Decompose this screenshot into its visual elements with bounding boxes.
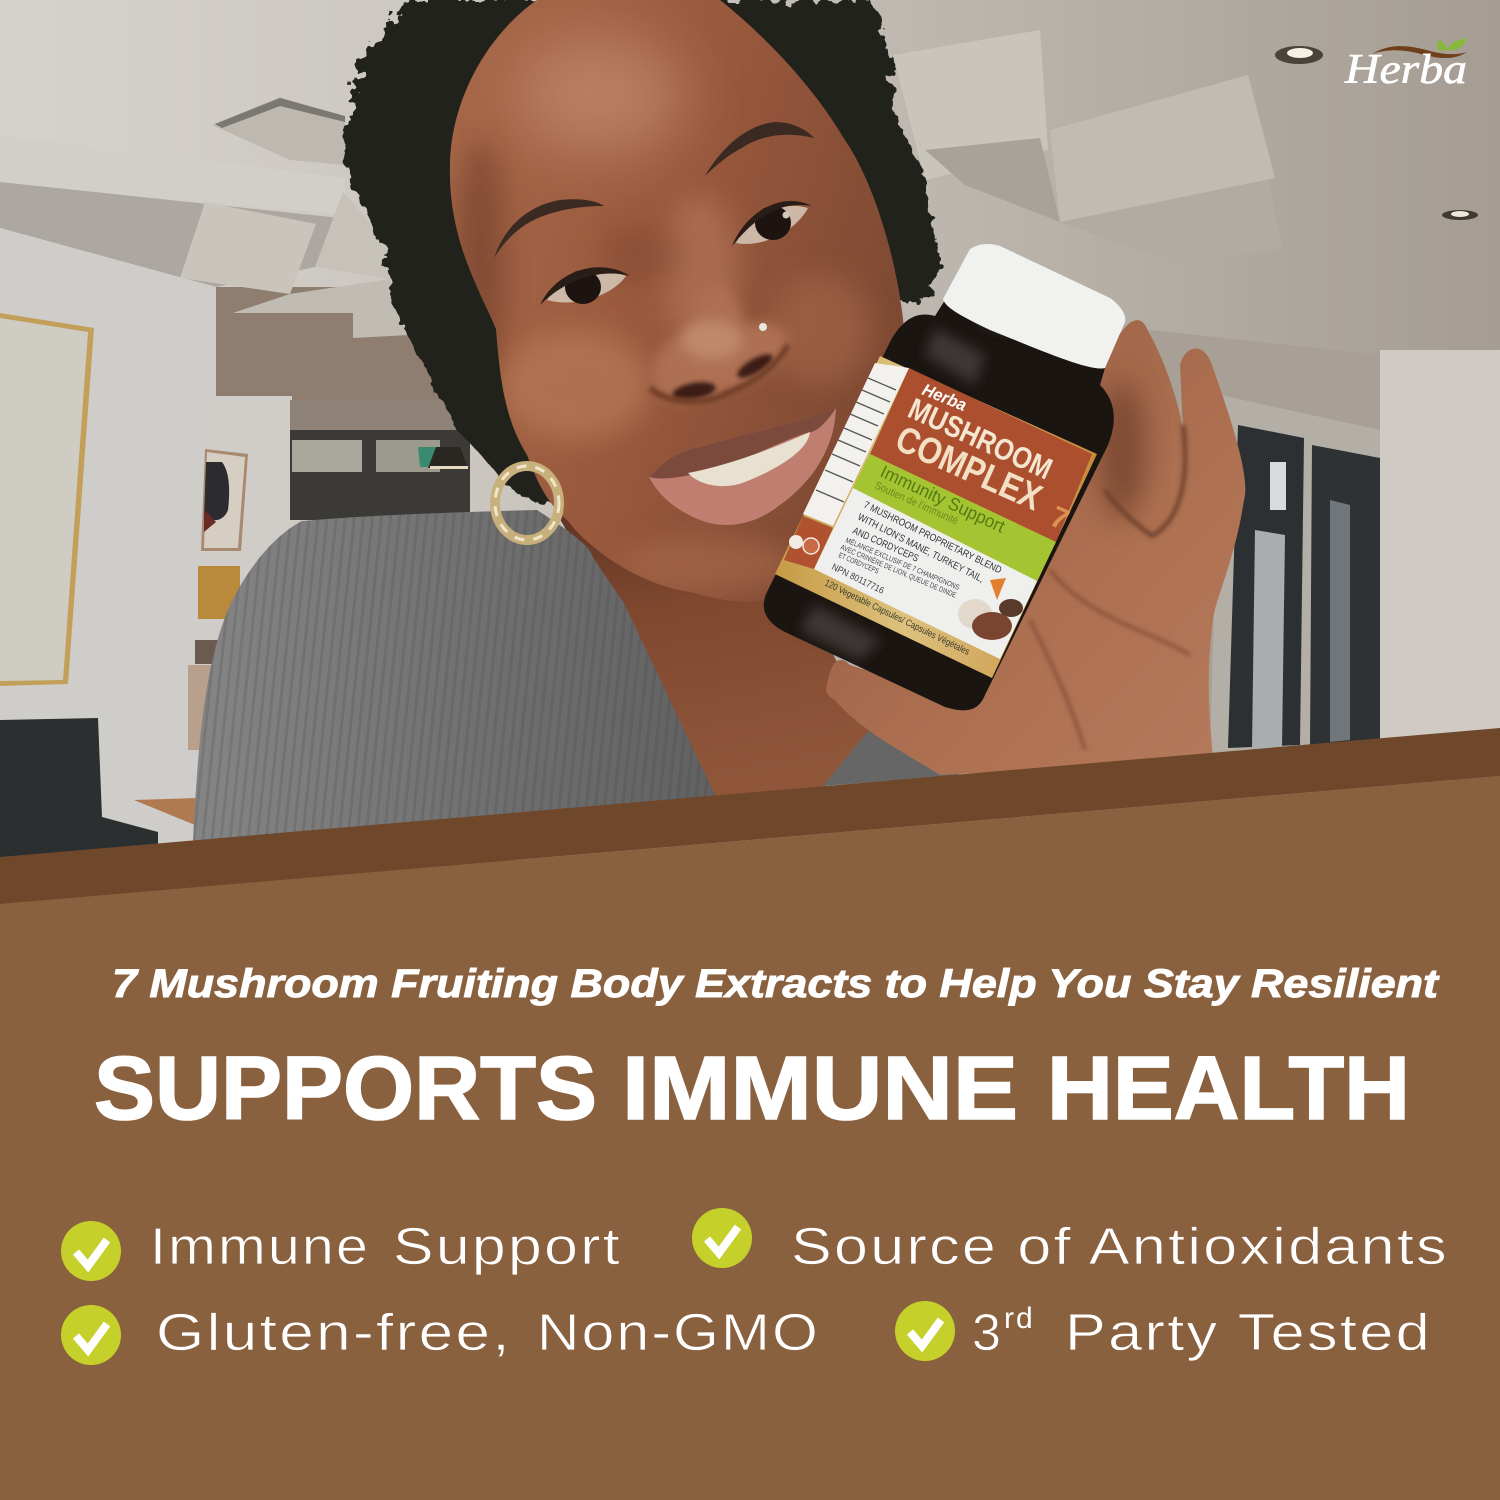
main heading: IMMUNE [622, 1039, 1018, 1139]
label text: WITH LION'S MANE, TURKEY TAIL, [856, 512, 985, 585]
label text: 7 [1045, 500, 1074, 537]
nose [650, 284, 788, 403]
benefit: Source of Antioxidants: Source of Antioxidants [791, 1218, 1449, 1276]
benefit: 3rd Party Tested: Party Tested [1065, 1304, 1432, 1362]
label text [823, 380, 1074, 658]
label text: 7 MUSHROOM PROPRIETARY BLEND [862, 500, 1003, 576]
ceiling lights [1275, 46, 1478, 220]
label text: Herba [920, 380, 969, 415]
brown panel [0, 776, 1500, 1500]
label [775, 356, 1097, 678]
hand [826, 320, 1245, 775]
photo background: office interior [0, 0, 1500, 860]
mushroom image [958, 578, 1023, 640]
benefit: Immune Support: Support [393, 1218, 622, 1276]
benefit: Immune Support [61, 1218, 622, 1281]
cap [943, 244, 1125, 368]
label text: AVEC CRINIÈRE DE LION, QUEUE DE DINDE [839, 543, 958, 600]
label seals [789, 535, 819, 554]
ceiling vent [212, 97, 345, 165]
product bottle [764, 244, 1125, 710]
benefit: 3rd Party Tested: 3 [972, 1304, 1001, 1362]
supplement facts lines [816, 378, 896, 502]
lips [649, 408, 836, 525]
label text: COMPLEX [890, 418, 1048, 518]
subheading: 7 Mushroom Fruiting Body Extracts to Help You Stay Resilient [112, 962, 1440, 1006]
main heading: SUPPORTS [94, 1039, 597, 1139]
bottle reflections [800, 305, 1018, 660]
benefit: Gluten-free, Non-GMO: Non-GMO [537, 1304, 820, 1362]
logo: Herba: Herba [1344, 47, 1467, 93]
wall art small [188, 449, 248, 750]
right eye [732, 201, 812, 246]
exit sign and pendant lamp [418, 447, 468, 469]
label text: Soutien de l'immunité [873, 480, 960, 527]
benefit: Immune Support: Immune [150, 1218, 370, 1276]
nose stud [759, 323, 767, 331]
right eyebrow [705, 122, 814, 176]
person [193, 0, 960, 842]
benefit: 3rd Party Tested: rd [1004, 1302, 1035, 1335]
label text: AND CORDYCEPS [851, 526, 920, 565]
benefit: 3rd Party Tested [895, 1301, 1432, 1362]
hair [346, 0, 940, 510]
left eyebrow [494, 199, 604, 258]
label text: 120 Vegetable Capsules/ Capsules Végétales [823, 578, 971, 658]
label text: MÉLANGE EXCLUSIF DE 7 CHAMPIGNONS [844, 536, 961, 592]
main heading [94, 1039, 1410, 1139]
left eye [540, 267, 630, 305]
benefit: Gluten-free, Non-GMO: Gluten-free, [156, 1304, 512, 1362]
dark brown diagonal band [0, 728, 1500, 904]
bench [0, 718, 197, 857]
sweater [193, 510, 960, 842]
framed wall art [0, 313, 94, 686]
ceiling acoustic panels [180, 30, 1282, 338]
label text: Immunity Support [877, 461, 1008, 537]
benefit: Gluten-free, Non-GMO [61, 1304, 820, 1365]
benefit: Source of Antioxidants [692, 1208, 1449, 1276]
bottle body [764, 300, 1114, 710]
neck [555, 510, 872, 800]
label text: MUSHROOM [903, 392, 1057, 486]
label text: ET CORDYCEPS [837, 551, 880, 576]
face [440, 0, 920, 610]
label text: NPN 80117716 [830, 562, 886, 597]
main heading: HEALTH [1047, 1039, 1410, 1139]
earring [495, 466, 559, 540]
